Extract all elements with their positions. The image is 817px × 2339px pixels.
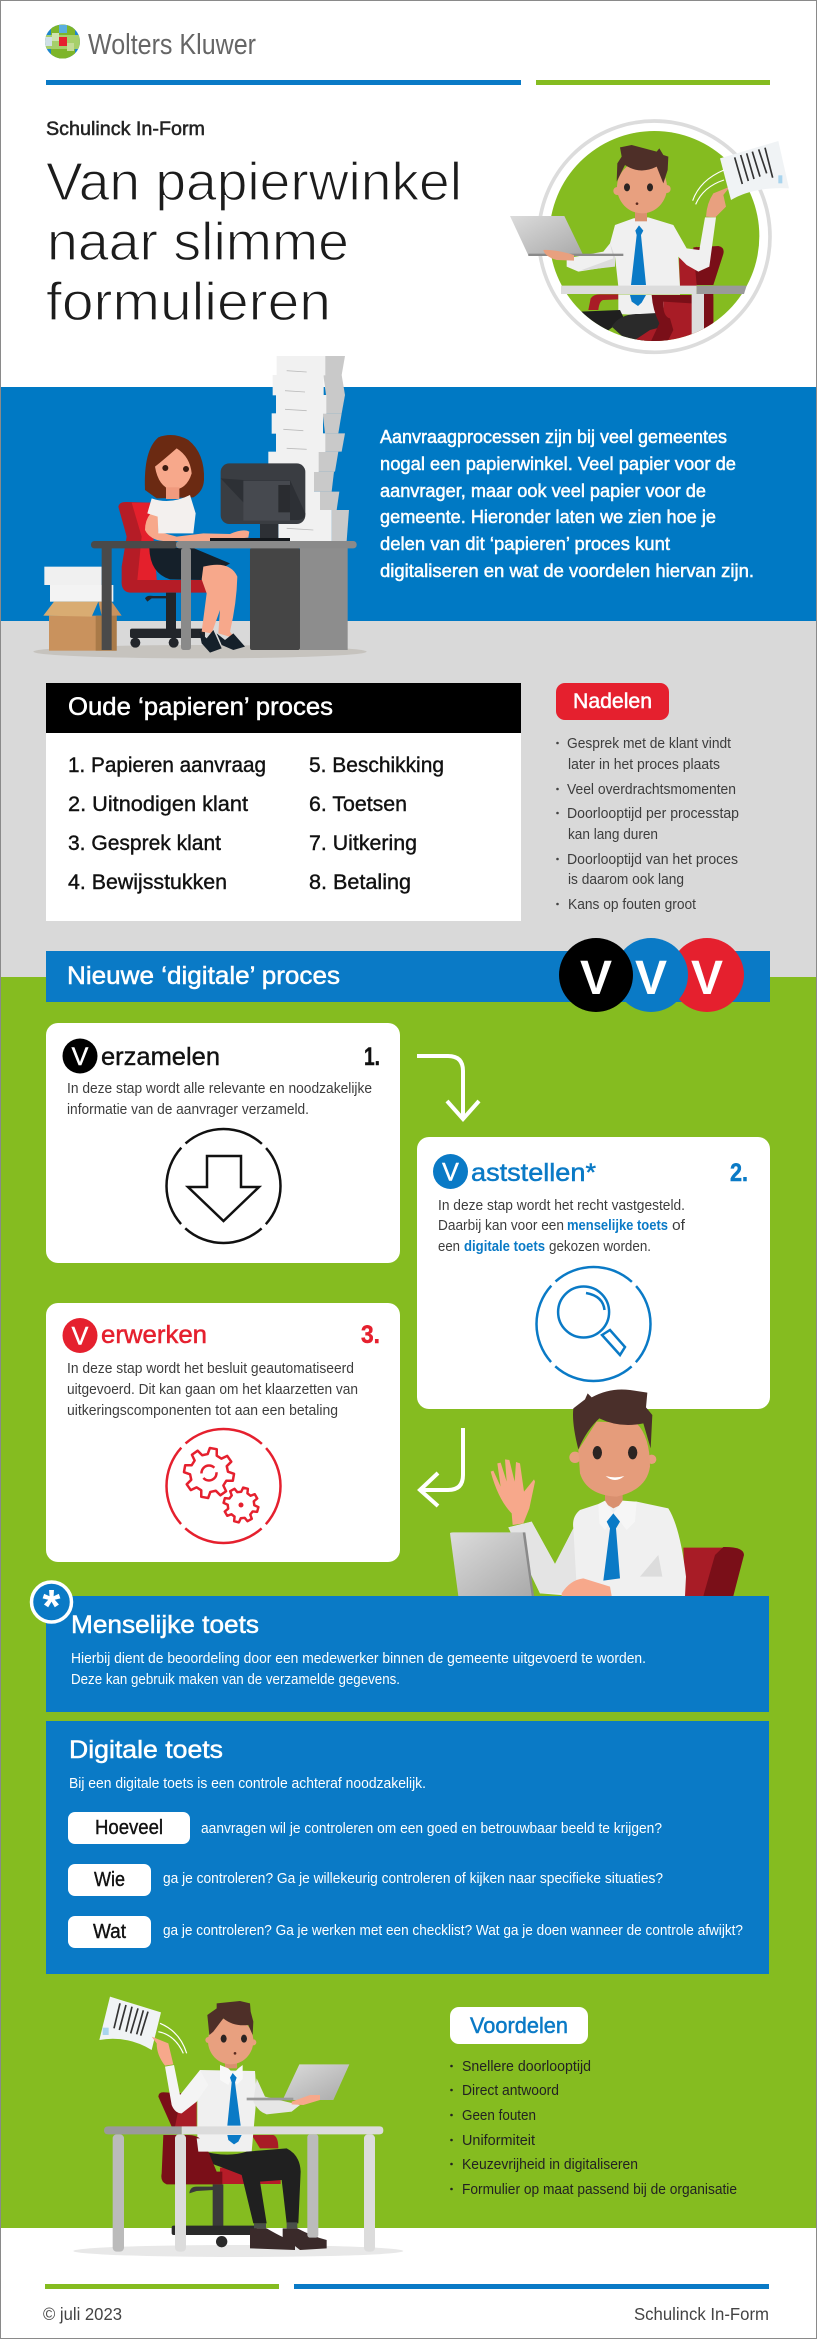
row: hoeveel	[68, 1812, 662, 1844]
heading: aststellen*	[471, 1159, 596, 1187]
nadelen list: is daarom ook lang	[568, 871, 684, 888]
description: In deze stap wordt het besluit geautomatiseerd	[67, 1360, 354, 1377]
title: Van papierwinkel	[46, 152, 462, 212]
heading: V	[72, 1322, 89, 1350]
panel: menselijke toets	[32, 1580, 769, 1712]
floor shadow	[33, 645, 367, 658]
step list: 7. Uitkering	[309, 831, 417, 855]
footer: © juli 2023	[43, 2304, 122, 2324]
step list: 1. Papieren aanvraag	[68, 753, 266, 777]
illustration: man throwing paper in circle	[510, 121, 789, 352]
voordelen list: Snellere doorlooptijd	[462, 2058, 591, 2075]
body text: Hierbij dient de beoordeling door een medewerker binnen de gemeente uitgevoerd te worden.	[71, 1650, 646, 1667]
description: of	[672, 1217, 686, 1234]
title: formulieren	[46, 272, 331, 332]
description: digitale toets	[464, 1238, 545, 1255]
chair	[118, 502, 210, 648]
step list: 6. Toetsen	[309, 792, 407, 816]
heading: Digitale toets	[69, 1736, 223, 1764]
step number: 3.	[361, 1321, 380, 1349]
illustration: woman at desk with paper stack	[33, 356, 367, 658]
nadelen list: kan lang duren	[568, 826, 658, 843]
heading: Menselijke toets	[71, 1611, 259, 1639]
V black	[559, 938, 633, 1012]
voordelen list: Direct antwoord	[462, 2082, 559, 2099]
intro text: aanvrager, maar ook veel papier voor de	[380, 480, 706, 501]
card 1: verzamelen	[46, 1023, 400, 1263]
description: uitgevoerd. Dit kan gaan om het klaarzetten van	[67, 1381, 358, 1398]
V black: V	[580, 952, 612, 1005]
label: Schulinck In-Form: Schulinck In-Form	[46, 118, 205, 140]
description: Daarbij kan voor een	[438, 1217, 564, 1234]
card 3: verwerken	[46, 1303, 400, 1562]
title	[46, 152, 462, 332]
voordelen list: Formulier op maat passend bij de organisatie	[462, 2181, 737, 2198]
heading: V	[442, 1158, 459, 1186]
voordelen list	[450, 2058, 737, 2198]
heading: erwerken	[101, 1321, 207, 1349]
intro: Bij een digitale toets is een controle achteraf noodzakelijk.	[69, 1775, 426, 1792]
nadelen list: Doorlooptijd van het proces	[567, 851, 738, 868]
intro text: gemeente. Hieronder laten we zien hoe je	[380, 506, 716, 527]
nadelen list: Veel overdrachtsmomenten	[567, 781, 736, 798]
banner heading: Nieuwe ‘digitale’ proces	[67, 962, 340, 990]
body text	[71, 1650, 646, 1688]
woman	[145, 435, 249, 653]
step list: 5. Beschikking	[309, 753, 444, 777]
step number: 2.	[730, 1159, 748, 1187]
nadelen list: Gesprek met de klant vindt	[567, 735, 732, 752]
footer	[43, 2304, 769, 2324]
title: naar slimme	[47, 212, 349, 272]
description: gekozen worden.	[549, 1238, 651, 1255]
arrow: card 1 to card 2	[417, 1056, 479, 1119]
voordelen list: Uniformiteit	[462, 2132, 536, 2149]
heading	[62, 1038, 220, 1074]
icon: download arrow	[166, 1129, 280, 1243]
heading	[433, 1154, 596, 1189]
row: wie	[68, 1864, 663, 1896]
description: een	[438, 1238, 460, 1255]
panel: nadelen	[556, 683, 739, 913]
illustration: man at white desk with paper and laptop	[73, 1997, 403, 2257]
intro text: digitaliseren en wat de voordelen hiervan zijn.	[380, 560, 754, 581]
intro text: nogal een papierwinkel. Veel papier voor de	[380, 453, 736, 474]
voordelen heading: Voordelen	[470, 2013, 568, 2038]
heading: Oude ‘papieren’ proces	[68, 693, 333, 721]
description	[438, 1197, 686, 1255]
description	[67, 1080, 372, 1118]
nadelen list: later in het proces plaats	[568, 756, 720, 773]
row: wat	[68, 1916, 743, 1948]
description: uitkeringscomponenten tot aan een betaling	[67, 1402, 338, 1419]
description	[67, 1360, 358, 1419]
icon: gears	[166, 1429, 280, 1543]
desk	[91, 541, 357, 650]
row: hoeveel: aanvragen wil je controleren om een goed en betrouwbaar beeld te krijgen?	[201, 1820, 662, 1837]
description: In deze stap wordt het recht vastgesteld.	[438, 1197, 685, 1214]
V red: V	[691, 952, 723, 1005]
step list: 3. Gesprek klant	[68, 831, 221, 855]
row: hoeveel: Hoeveel	[95, 1817, 163, 1839]
panel: digitale toets	[46, 1721, 769, 1974]
nadelen list: Kans op fouten groot	[568, 896, 697, 913]
V red	[670, 938, 744, 1012]
voordelen list: Geen fouten	[462, 2107, 536, 2124]
logo: Wolters Kluwer	[45, 24, 256, 61]
card 2: vaststellen	[417, 1137, 770, 1409]
panel: voordelen	[450, 2007, 737, 2198]
footer: Schulinck In-Form	[634, 2304, 769, 2324]
illustration: waving man with laptop	[450, 1389, 744, 1596]
logo wordmark: Wolters Kluwer	[88, 29, 256, 61]
step list	[68, 753, 444, 894]
bottom rules	[45, 2284, 769, 2289]
row: wat: Wat	[93, 1921, 126, 1943]
nadelen heading: Nadelen	[573, 690, 652, 713]
panel: oude papieren proces	[46, 683, 521, 921]
step list: 4. Bewijsstukken	[68, 870, 227, 894]
V blue: V	[635, 952, 667, 1005]
description: informatie van de aanvrager verzameld.	[67, 1101, 309, 1118]
row: wat: ga je controleren? Ga je werken met een checklist? Wat ga je doen wanneer de controle afwijkt?	[163, 1922, 743, 1939]
row: wie: ga je controleren? Ga je willekeurig controleren of kijken naar specifieke situaties?	[163, 1870, 663, 1887]
step list: 2. Uitnodigen klant	[68, 792, 248, 816]
voordelen list: Keuzevrijheid in digitaliseren	[462, 2156, 638, 2173]
row: wie: Wie	[94, 1869, 125, 1891]
step list: 8. Betaling	[309, 870, 411, 894]
icon: globe	[45, 24, 81, 60]
icon: asterisk badge	[32, 1580, 72, 1632]
heading: erzamelen	[101, 1043, 220, 1071]
arrow: card 2 to card 3	[420, 1428, 463, 1506]
V blue	[614, 938, 688, 1012]
body text: Deze kan gebruik maken van de verzamelde gegevens.	[71, 1671, 400, 1688]
description: menselijke toets	[567, 1217, 668, 1234]
banner: nieuwe digitale proces	[46, 938, 770, 1012]
monitor	[210, 463, 305, 541]
heading	[62, 1318, 207, 1353]
icon: asterisk badge: *	[43, 1580, 61, 1632]
intro text: delen van dit ‘papieren’ proces kunt	[380, 533, 670, 554]
paper stack	[268, 356, 349, 541]
small paper pile and box	[43, 567, 122, 651]
step number: 1.	[364, 1043, 380, 1071]
intro text	[380, 426, 754, 581]
icon: magnifier	[536, 1267, 650, 1381]
nadelen list: Doorlooptijd per processtap	[567, 805, 739, 822]
nadelen list	[556, 735, 739, 913]
top rules	[46, 80, 770, 85]
intro text: Aanvraagprocessen zijn bij veel gemeentes	[380, 426, 727, 447]
heading: V	[72, 1043, 89, 1071]
description: In deze stap wordt alle relevante en noodzakelijke	[67, 1080, 372, 1097]
